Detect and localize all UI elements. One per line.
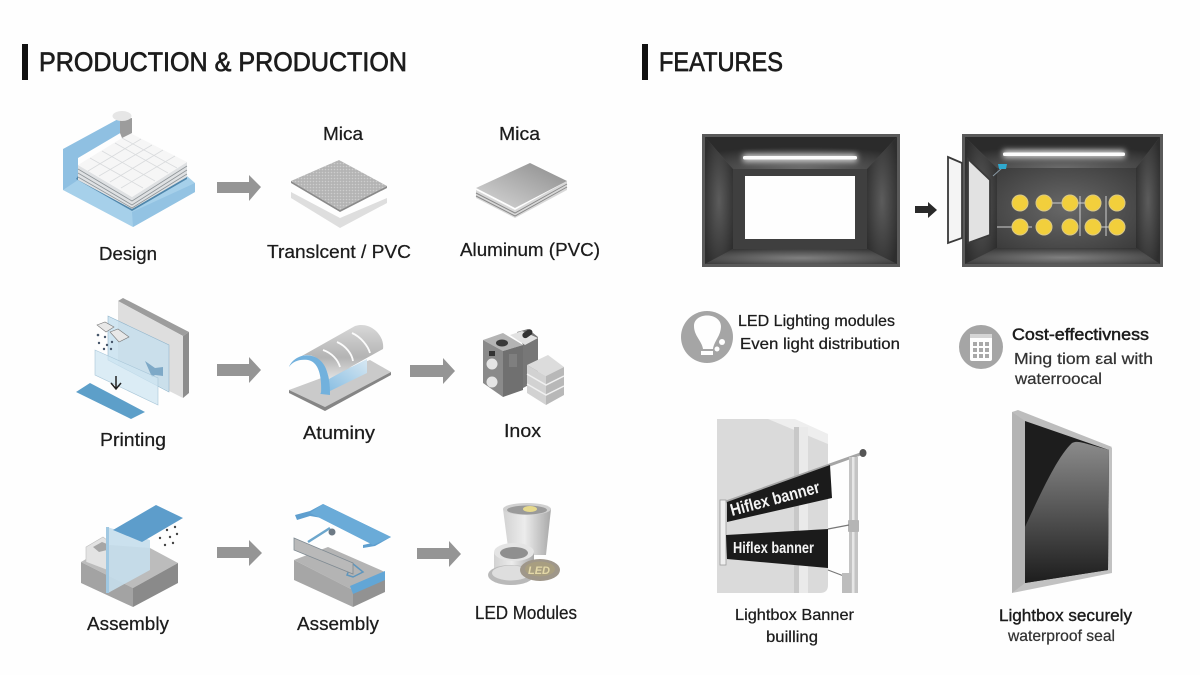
arrow bbox=[217, 540, 262, 566]
label: printing: Printing bbox=[100, 430, 166, 450]
led connector wires bbox=[997, 196, 1117, 236]
label: inox: Inox bbox=[504, 421, 541, 441]
label: aluminum pvc: Aluminum (PVC) bbox=[460, 240, 600, 260]
arrow bbox=[417, 541, 461, 567]
lightbox front view bbox=[702, 134, 900, 267]
icon: design layered sheets bbox=[63, 111, 195, 227]
door panel inner bbox=[968, 159, 990, 243]
icon: curved aluminum bbox=[289, 325, 391, 411]
icon: led modules: LED bbox=[528, 565, 550, 577]
text: cost-effectiveness bbox=[1012, 326, 1153, 388]
arrow bbox=[217, 175, 261, 201]
icon: led modules bbox=[488, 503, 560, 585]
heading: features: FEATURES bbox=[659, 47, 783, 77]
banner lower bbox=[726, 529, 828, 568]
arrow bbox=[217, 357, 261, 383]
label: mica: Mica bbox=[323, 124, 364, 144]
icon: assembly glass on block bbox=[81, 505, 183, 607]
blue sensor bbox=[993, 164, 1007, 176]
door panel outer bbox=[948, 157, 962, 243]
arrow bbox=[410, 358, 455, 384]
icon: aluminum stack bbox=[476, 163, 567, 218]
label: assembly: Assembly bbox=[87, 614, 169, 634]
icon: inox machine bbox=[483, 328, 564, 405]
label: mica: Mica bbox=[499, 124, 541, 144]
icon: printing bbox=[76, 298, 189, 419]
text: led lighting bbox=[738, 313, 900, 353]
caption: lightbox securely bbox=[999, 606, 1132, 645]
illustration: framed lightbox bbox=[1012, 410, 1112, 593]
label: atuminy: Atuminy bbox=[303, 423, 375, 443]
icon: textured sheets bbox=[291, 160, 387, 228]
label: assembly: Assembly bbox=[297, 614, 379, 634]
caption: lightbox banner: builling bbox=[766, 629, 818, 646]
label: translucent pvc: Translcent / PVC bbox=[267, 242, 411, 262]
caption: lightbox securely: waterproof seal bbox=[1007, 628, 1115, 645]
text: led lighting: LED Lighting modules bbox=[738, 313, 895, 330]
text: led lighting: Even light distribution bbox=[740, 336, 900, 353]
label: design: Design bbox=[99, 244, 157, 264]
banner lower: Hiflex banner bbox=[733, 540, 814, 557]
illustration: hiflex banner on building bbox=[717, 419, 866, 593]
icon: assembly frame bbox=[294, 504, 391, 607]
lightbox open view with led modules bbox=[948, 134, 1163, 267]
led module dots bbox=[1012, 195, 1125, 235]
arrow bbox=[915, 202, 937, 218]
label: led modules: LED Modules bbox=[475, 603, 577, 623]
caption: lightbox banner bbox=[735, 607, 855, 646]
text: cost-effectiveness: waterroocal bbox=[1014, 371, 1102, 388]
banner upper: Hiflex banner bbox=[728, 478, 822, 520]
text: cost-effectiveness: Cost-effectivness bbox=[1012, 326, 1149, 344]
icon: bulb bbox=[681, 311, 733, 363]
caption: lightbox securely: Lightbox securely bbox=[999, 606, 1132, 625]
heading: features bbox=[642, 44, 783, 80]
icon: calendar bbox=[959, 325, 1003, 369]
text: cost-effectiveness: Ming tiom εal with bbox=[1014, 351, 1153, 368]
caption: lightbox banner: Lightbox Banner bbox=[735, 607, 855, 624]
heading: production: PRODUCTION & PRODUCTION bbox=[39, 47, 407, 77]
